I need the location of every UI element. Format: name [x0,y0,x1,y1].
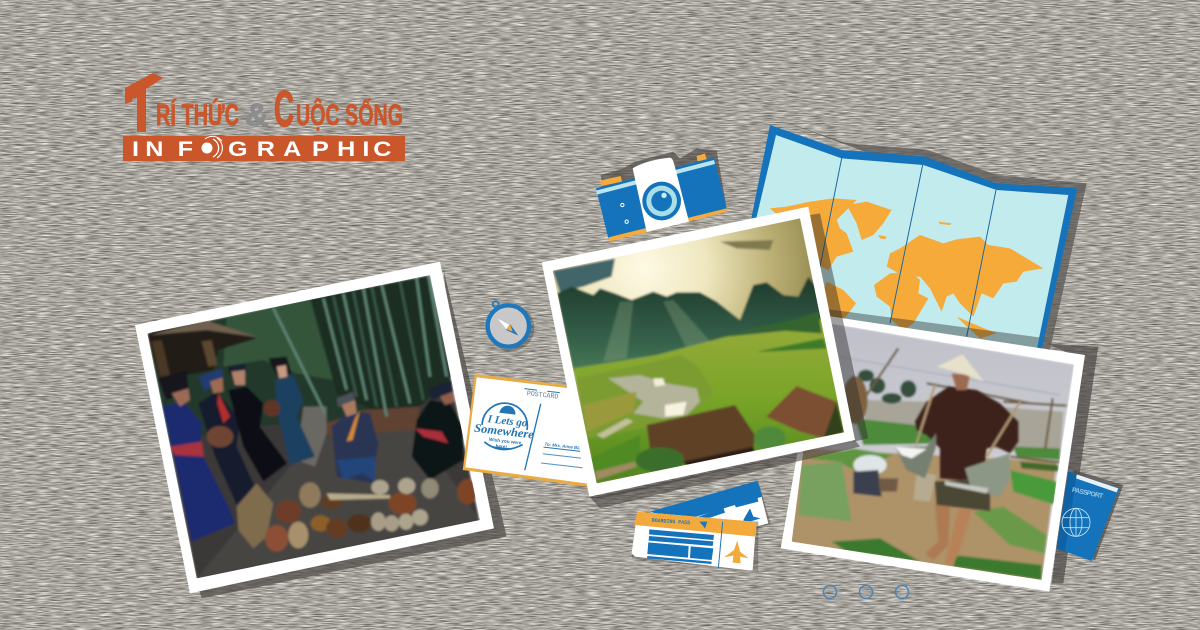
huts [647,405,755,465]
photo: valley and mountains [542,207,868,508]
farmer legs [925,503,950,560]
camera front plate [633,158,689,232]
conical hat [937,354,984,382]
watering cans [895,433,936,478]
front ticket: BOARDING PASS [652,518,691,526]
photo 1 image [147,275,480,580]
logo: wordmark: RÍ THỨC [156,98,239,132]
postcard [463,374,592,487]
shrubs [636,447,684,473]
logo: wordmark [156,81,403,137]
postcard badge: Somewhere [473,421,535,442]
postcard card [463,374,592,487]
postcard badge [472,400,538,453]
map shadow [780,120,1087,350]
passport title: PASSPORT [1071,487,1104,500]
front ticket shadow [632,513,758,572]
rear ticket [650,481,768,530]
farmer [895,354,1021,565]
photo 2 image [550,215,847,487]
logo: infographic band [123,136,405,161]
camera shadow [601,148,727,237]
postcard badge: here! [495,443,508,450]
camera top buttons [600,176,622,186]
artisan figures [163,402,235,542]
camera lens [642,182,681,220]
poles [867,348,1067,462]
pagination dots [824,586,908,598]
rear ticket shadow [653,482,771,532]
hut [147,320,257,380]
logo: wordmark: C [274,81,294,137]
photo: bamboo village artisans [135,262,507,598]
logo: wordmark: UỘC SỐNG [296,98,403,132]
passport globe [1062,508,1090,536]
logo: big T mark [125,73,163,132]
boarding passes [632,481,771,572]
logo: wordmark: & [245,97,269,133]
baskets [237,483,273,548]
photo 1 shadow [190,270,507,598]
passport cover [1057,472,1119,561]
round basket [842,376,868,424]
logo: infographic band: GRAPHIC [228,137,392,161]
logo: infographic band: INF [132,137,193,161]
logo [123,73,405,161]
map paper [740,135,1068,350]
palms [858,370,916,404]
postcard badge: Wish you were [489,437,522,446]
passport [1057,470,1123,561]
map sheet [737,125,1077,350]
camera icon [596,148,727,242]
sun rays [603,302,633,362]
farmer head [952,373,970,390]
photo 3 shadow [1047,343,1098,583]
shoulder poles [916,385,935,445]
farmer shorts [935,478,990,511]
map fold lines [820,158,996,337]
passport shadow [1073,470,1123,560]
postcard heading: POSTCARD [526,390,559,402]
postcard badge: I Lets go [486,413,529,430]
photo 2 frame [542,207,855,497]
postcard address: To: Mrs. Anne Black [544,441,586,451]
photo: farmer watering vegetables [781,315,1098,592]
photo 3 image [790,322,1074,582]
camera body [596,157,727,238]
photo 2 shadow [590,213,868,498]
continents [770,198,1043,353]
camera dots [621,203,624,207]
photo 3 shadow on map [829,309,1040,348]
farmer shirt [915,387,1018,480]
photo 3 frame [781,315,1085,592]
photo 1 frame [135,262,494,593]
bamboo stalks [273,275,447,417]
plane icon [724,541,749,563]
compass icon [488,301,534,351]
world map [737,120,1087,353]
